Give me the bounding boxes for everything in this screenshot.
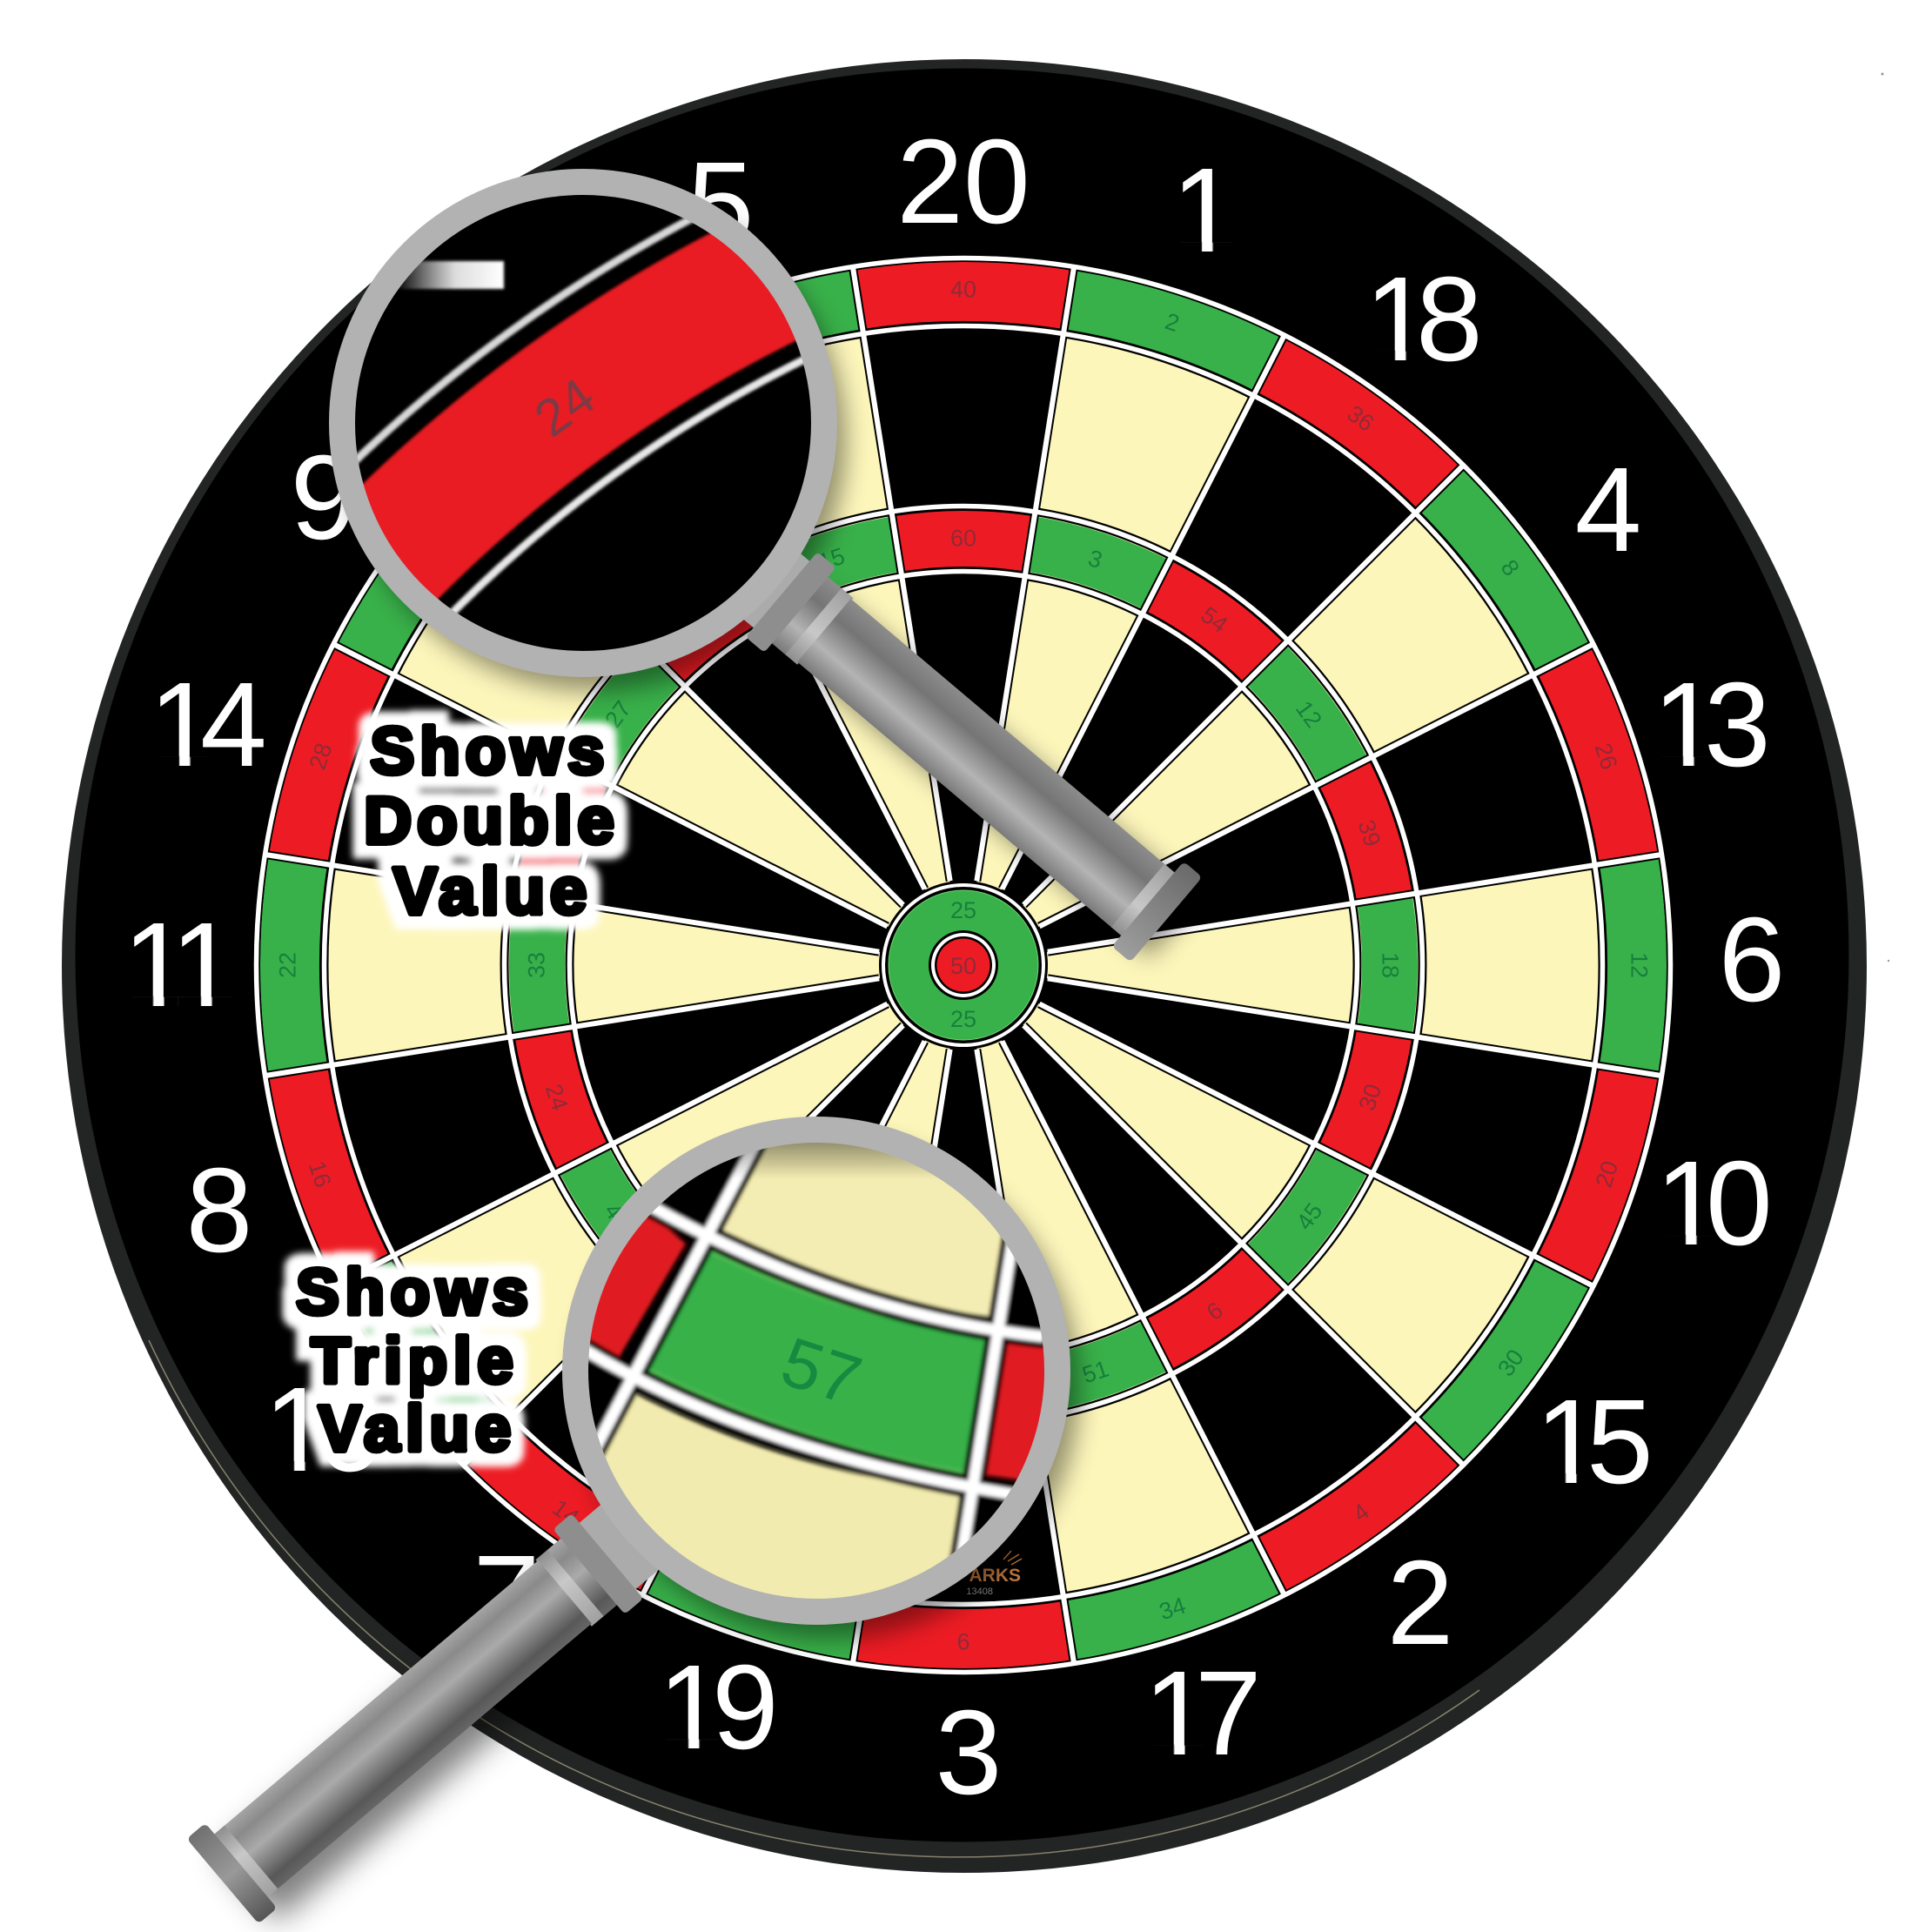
triple ring values: 30 [1354, 1081, 1386, 1114]
triple ring values: 48 [599, 1198, 635, 1235]
dartboard playing area [256, 258, 1671, 1673]
double ring values: 2 [1162, 308, 1183, 337]
callout: shows double value: Double [364, 784, 620, 858]
cream single segments [324, 325, 1603, 1605]
triple ring values: 9 [956, 1380, 970, 1406]
lens view: magnified green triple segment [588, 1143, 1044, 1599]
outer segment numbers: 2 [1387, 1536, 1453, 1670]
lens ring [575, 1130, 1057, 1612]
outer segment numbers: 0 [1706, 1137, 1773, 1271]
triple ring values: 45 [1291, 1198, 1328, 1235]
outer segment numbers: 4 [200, 658, 267, 792]
lens view: magnified green triple segment: 57 [773, 1322, 870, 1420]
double ring values: 30 [1493, 1345, 1529, 1381]
wire spider [256, 258, 1671, 1673]
outer segment numbers: 1 [658, 1640, 725, 1774]
triple ring values: 21 [694, 1293, 730, 1330]
green double and triple segments [260, 262, 1667, 1668]
magnifier handle [186, 1483, 680, 1924]
triple ring values: 54 [1196, 601, 1232, 638]
lens view: magnified red double segment: 24 [524, 366, 606, 448]
double ring values: 10 [738, 306, 771, 339]
outer segment numbers: 7 [473, 1531, 540, 1665]
lens view: magnified red double segment [357, 218, 811, 651]
bullseye: 50 [950, 953, 976, 979]
double ring values: 14 [547, 1494, 584, 1531]
outer segment numbers: 5 [688, 138, 754, 272]
double ring values: 28 [305, 740, 337, 773]
outer segment numbers: 1 [123, 898, 190, 1032]
triple ring values: 3 [1085, 545, 1105, 574]
outer segment numbers: 5 [1587, 1375, 1654, 1509]
outer segment numbers: 4 [1575, 443, 1641, 577]
triple ring values: 36 [694, 601, 731, 638]
triple ring values: 42 [541, 817, 574, 849]
double ring values: 40 [950, 277, 976, 303]
double ring values: 16 [304, 1157, 336, 1191]
triple ring values: 12 [1291, 696, 1327, 733]
triple ring values: 60 [950, 526, 976, 552]
double ring values: 22 [275, 952, 301, 978]
outer segment numbers: 7 [1195, 1647, 1262, 1781]
outer segment numbers: 3 [936, 1686, 1002, 1820]
red double and triple segments [260, 262, 1667, 1668]
double ring values: 38 [738, 1593, 771, 1625]
double ring values: 36 [1342, 400, 1379, 437]
outer segment numbers: 9 [291, 431, 357, 565]
lens ring [342, 182, 824, 664]
triple ring values: 57 [815, 1356, 848, 1388]
outer segment numbers: 8 [1416, 252, 1483, 386]
manufacturer logo: 13408 [966, 1587, 993, 1597]
outer segment numbers: 1 [149, 658, 216, 792]
callout: shows double value: Value [393, 855, 592, 929]
callout: shows triple value: Value [319, 1392, 517, 1465]
double ring values: 12 [1626, 952, 1652, 978]
double ring values: 24 [548, 400, 585, 437]
double ring values: 6 [956, 1629, 970, 1655]
bullseye: 25 [950, 897, 976, 923]
double ring values: 34 [1156, 1593, 1189, 1625]
triple ring values: 15 [815, 543, 848, 575]
outer segment numbers: 20 [896, 115, 1030, 249]
triple ring values: 24 [540, 1081, 573, 1114]
triple ring values: 27 [600, 696, 636, 733]
double ring values: 26 [1590, 740, 1622, 773]
outer segment numbers: 6 [315, 1363, 382, 1497]
magnifier handle [709, 521, 1203, 963]
magnifier shadows [248, 190, 1175, 1888]
manufacturer logo: ARKS [969, 1566, 1021, 1586]
outer segment numbers: 1 [264, 1363, 331, 1497]
outer segment numbers: 1 [171, 898, 238, 1032]
callout: shows double value: Shows [371, 714, 609, 788]
callout: shows triple value: Triple [311, 1325, 520, 1397]
double ring values [275, 277, 1653, 1655]
double ring values: 20 [1591, 1157, 1623, 1191]
outer segment numbers: 8 [186, 1144, 252, 1278]
triple ring values: 6 [1202, 1297, 1228, 1325]
bullseye: 25 [950, 1006, 976, 1032]
triple ring values: 33 [524, 952, 550, 978]
double ring values: 4 [1348, 1498, 1374, 1527]
outer segment numbers: 1 [1365, 252, 1432, 386]
outer segment numbers: 3 [1704, 658, 1771, 792]
double ring values: 32 [398, 1345, 434, 1381]
double ring values: 8 [1496, 555, 1525, 580]
callout: shows triple value: Shows [296, 1256, 534, 1328]
magnifier: double ring [329, 169, 1201, 961]
double ring values: 18 [399, 550, 435, 587]
outer segment numbers: 1 [1144, 1647, 1211, 1781]
outer segment numbers: 1 [1171, 144, 1238, 278]
bullseye [879, 881, 1048, 1050]
magnifier: triple ring [186, 1105, 1057, 1924]
outer segment numbers: 9 [712, 1640, 779, 1774]
outer segment numbers: 1 [1535, 1375, 1602, 1509]
callout: shows triple value [296, 1256, 534, 1465]
manufacturer logo [966, 1551, 1022, 1597]
triple ring values: 39 [1353, 817, 1385, 849]
triple ring values: 18 [1377, 952, 1403, 978]
outer segment numbers: 12 [435, 252, 569, 386]
callout: shows double value [364, 714, 620, 929]
triple ring values [524, 526, 1403, 1406]
outer segment numbers: 6 [1719, 893, 1785, 1027]
outer segment numbers [123, 115, 1785, 1820]
outer segment numbers: 1 [1655, 1137, 1722, 1271]
outer segment numbers: 1 [1653, 658, 1720, 792]
triple ring values: 51 [1079, 1356, 1112, 1388]
